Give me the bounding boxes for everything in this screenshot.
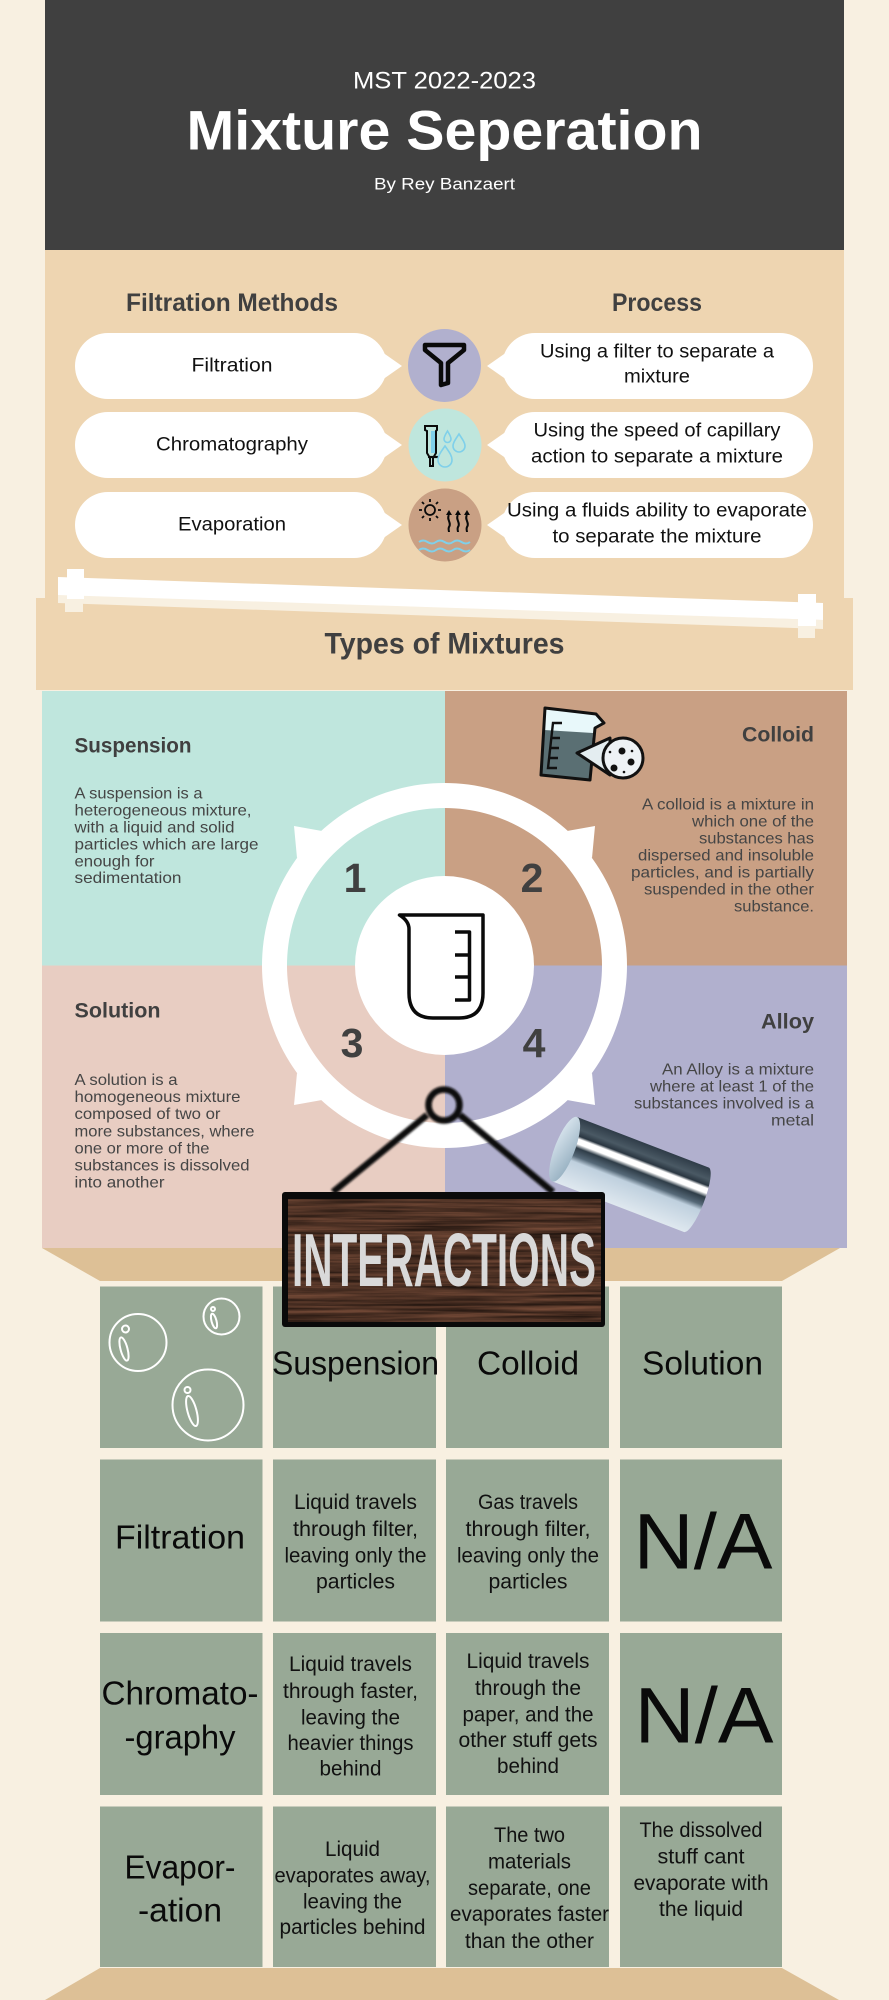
text: suspension description: with a liquid and solid [73, 820, 234, 836]
row label: chromatography: Chromato- [102, 1674, 258, 1712]
text: alloy description: where at least 1 of the [649, 1078, 814, 1096]
cell: filtration and solution: N/A [634, 1496, 773, 1586]
cell: evaporation and solution: evaporate with [634, 1872, 768, 1895]
panel: types of mixtures banner [36, 598, 853, 690]
row: chromatography: Using the speed of capillary [534, 420, 781, 442]
cell: filtration and suspension: Liquid travels [294, 1491, 417, 1514]
cell: evaporation and solution: the liquid [659, 1898, 743, 1921]
cell: chromatography and solution: N/A [634, 1670, 774, 1760]
row label: evaporation: Evapor- [124, 1848, 236, 1886]
text: colloid description: A colloid is a mixture in [642, 796, 814, 814]
header cell: bubbles [100, 1286, 262, 1448]
cell: evaporation and colloid: evaporates faster [450, 1903, 609, 1926]
heading: filtration methods: Filtration Methods [126, 289, 338, 317]
heading: solution: Solution [74, 1000, 160, 1022]
header cell: solution: Solution [642, 1344, 763, 1382]
band below grid [45, 1968, 839, 2000]
row label: filtration: Filtration [115, 1518, 245, 1556]
cell: chromatography and suspension: heavier things [288, 1732, 414, 1755]
title: Mixture Seperation [186, 98, 702, 162]
text: alloy description: metal [771, 1112, 814, 1130]
text: solution description: into another [74, 1174, 165, 1192]
panel: solution [42, 966, 445, 1248]
row: filtration: mixture [624, 366, 690, 388]
panel: suspension [42, 691, 445, 966]
cell: chromatography and suspension: behind [320, 1758, 382, 1780]
text: suspension description: A suspension is a [74, 786, 203, 802]
cell: evaporation and colloid [446, 1806, 609, 1967]
header cell: solution [620, 1286, 782, 1448]
cell: chromatography and suspension: through faster, [283, 1680, 418, 1703]
cell: evaporation and solution: The dissolved [640, 1819, 762, 1842]
cell: evaporation and suspension [273, 1806, 436, 1967]
cell: chromatography and solution [620, 1633, 782, 1795]
text: alloy description: An Alloy is a mixture [662, 1062, 814, 1078]
hanger [333, 1090, 553, 1192]
cell: chromatography and suspension: Liquid travels [289, 1653, 412, 1676]
header cell: suspension [272, 1286, 439, 1448]
panel: colloid [445, 691, 847, 966]
cell: filtration and colloid: particles [488, 1570, 568, 1594]
row: chromatography: action to separate a mixture [531, 446, 783, 468]
row: chromatography: Chromatography [156, 434, 309, 456]
row: evaporation: to separate the mixture [552, 526, 762, 548]
cell: filtration and suspension: through filter, [293, 1518, 418, 1541]
cell: evaporation and colloid: than the other [465, 1930, 594, 1953]
cell: chromatography and suspension [273, 1633, 436, 1795]
image: metal cylinder [543, 1113, 716, 1235]
byline: By Rey Banzaert [374, 174, 515, 194]
text: solution description: more substances, where [74, 1124, 255, 1140]
text: alloy description: substances involved is a [634, 1096, 814, 1112]
cell: filtration and suspension [273, 1460, 436, 1622]
row: filtration [75, 333, 813, 399]
text: colloid description: particles, and is partially [631, 864, 814, 882]
text: solution description: one or more of the [74, 1140, 210, 1158]
text: solution description: composed of two or [74, 1106, 221, 1123]
cell: evaporation and suspension: leaving the [303, 1890, 402, 1914]
number 4: 4 [523, 1020, 546, 1066]
heading: process: Process [612, 289, 702, 317]
row label: chromatography: -graphy [124, 1718, 236, 1756]
icon: chromatography column [408, 408, 482, 482]
text: suspension description [73, 786, 259, 887]
icon: bubbles [110, 1298, 244, 1440]
text: colloid description: which one of the [691, 814, 814, 830]
cell: chromatography and colloid: paper, and the [462, 1704, 594, 1726]
heading: types of mixtures: Types of Mixtures [324, 628, 564, 660]
text: alloy description [634, 1062, 814, 1130]
text: colloid description: suspended in the other [644, 882, 815, 898]
icon: evaporation [408, 488, 482, 562]
cell: evaporation and solution [620, 1806, 782, 1967]
cell: chromatography and suspension: leaving the [301, 1706, 400, 1730]
row label: evaporation: -ation [138, 1892, 222, 1928]
cell: filtration and suspension: leaving only the [284, 1544, 426, 1568]
course label: MST 2022-2023 [353, 68, 536, 94]
cell: evaporation and suspension: particles behind [280, 1916, 426, 1939]
panel: interactions grid [100, 1286, 782, 1967]
text: colloid description: substance. [734, 898, 814, 916]
cell: chromatography and colloid [446, 1633, 609, 1795]
header cell: colloid [446, 1286, 609, 1448]
row label: evaporation [100, 1806, 262, 1967]
row: filtration: Using a filter to separate a [540, 342, 774, 362]
cell: chromatography and colloid: behind [497, 1755, 559, 1778]
header cell: colloid: Colloid [477, 1344, 579, 1382]
cycle ring [262, 783, 627, 1148]
number 2: 2 [521, 855, 543, 901]
cell: evaporation and colloid: separate, one [468, 1877, 591, 1900]
text: suspension description: particles which are large [74, 836, 259, 854]
panel: alloy [445, 966, 847, 1248]
band above grid [42, 1248, 840, 1281]
row label: chromatography [100, 1633, 262, 1795]
text: suspension description: sedimentation [74, 870, 182, 887]
row: evaporation: Evaporation [178, 514, 286, 536]
cell: filtration and colloid: through filter, [466, 1518, 590, 1541]
cell: evaporation and suspension: evaporates away, [274, 1864, 430, 1888]
row label: filtration [100, 1460, 262, 1622]
sign: interactions [282, 1090, 605, 1327]
icon: central beaker [400, 915, 483, 1018]
icon: colloid beaker [541, 708, 643, 780]
text: colloid description: dispersed and insoluble [638, 848, 814, 864]
row: filtration: Filtration [192, 356, 272, 376]
row: chromatography [75, 412, 813, 478]
cell: chromatography and colloid: other stuff gets [458, 1729, 598, 1752]
cell: evaporation and suspension: Liquid [325, 1838, 380, 1861]
text: suspension description: heterogeneous mixture, [74, 802, 252, 820]
heading: alloy: Alloy [761, 1010, 814, 1034]
header cell: suspension: Suspension [272, 1344, 439, 1382]
text: solution description: homogeneous mixture [74, 1089, 241, 1106]
cell: evaporation and colloid: The two [494, 1824, 565, 1847]
panel: filtration methods [45, 250, 844, 600]
heading: colloid: Colloid [742, 724, 814, 746]
sign board [282, 1192, 605, 1327]
cell: chromatography and colloid: through the [475, 1677, 581, 1700]
cell: filtration and colloid: leaving only the [457, 1544, 599, 1568]
text: colloid description: substances has [699, 830, 814, 848]
ribbon [58, 569, 823, 638]
text: solution description: A solution is a [74, 1072, 178, 1089]
sign text: INTERACTIONS [292, 1218, 596, 1302]
text: solution description: substances is dissolved [74, 1158, 250, 1174]
icon: funnel [408, 329, 481, 402]
cell: chromatography and colloid: Liquid travels [466, 1650, 590, 1673]
text: suspension description: enough for [74, 854, 155, 870]
text: solution description [74, 1072, 255, 1192]
wood texture [288, 1199, 601, 1322]
number 3: 3 [341, 1020, 363, 1066]
cell: evaporation and colloid: materials [488, 1850, 571, 1874]
cell: filtration and suspension: particles [316, 1570, 395, 1594]
heading: suspension: Suspension [74, 734, 192, 758]
text: colloid description [631, 796, 815, 916]
row: evaporation [75, 492, 813, 558]
row: evaporation: Using a fluids ability to evaporate [507, 500, 807, 522]
cell: filtration and colloid: Gas travels [478, 1491, 578, 1514]
panel: header [45, 0, 844, 250]
cell: filtration and solution [620, 1460, 782, 1622]
cell: filtration and colloid [446, 1460, 609, 1622]
number 1: 1 [344, 855, 366, 901]
cell: evaporation and solution: stuff cant [658, 1846, 745, 1868]
